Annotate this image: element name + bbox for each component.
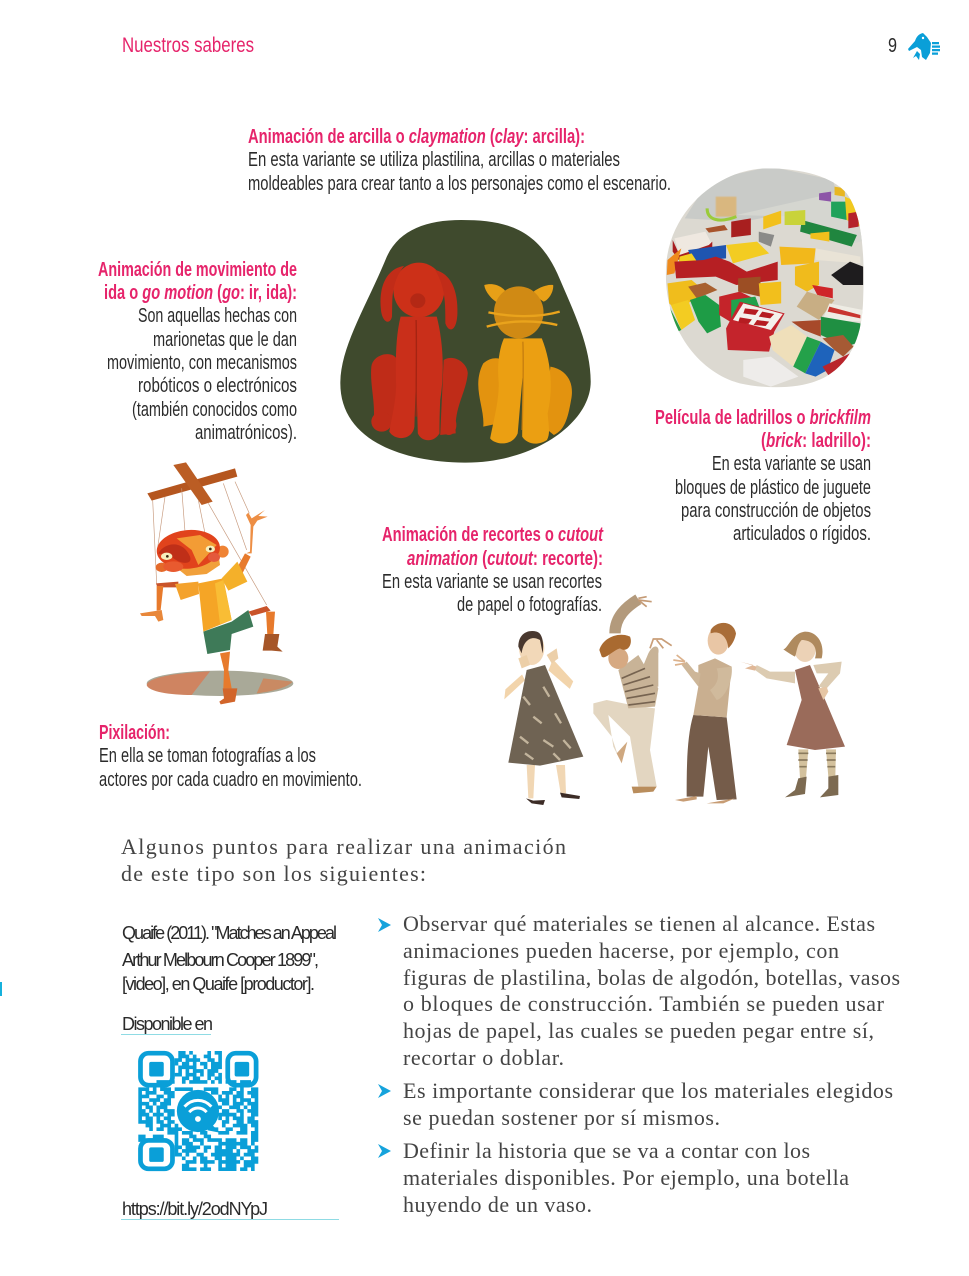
bullet one text [403, 911, 900, 1070]
child: girl with brown dress [740, 632, 845, 797]
citation: [video], en Quaife [productor]. [122, 974, 315, 994]
arrow bullet one [378, 918, 391, 932]
bullet three text: materiales disponibles. Por ejemplo, una botella [403, 1165, 849, 1190]
bullet one text: hojas de papel, las cuales se pueden pegar entre sí, [403, 1018, 874, 1043]
section heading: de este tipo son los siguientes: [121, 861, 426, 886]
body: brickfilm: para construcción de objetos [681, 500, 871, 522]
body: go motion: marionetas que le dan [153, 329, 297, 351]
body: go motion [107, 305, 297, 444]
bullet two [378, 1078, 893, 1130]
heading: brickfilm: (brick: ladrillo): [761, 430, 871, 452]
section heading: Algunos puntos para realizar una animación [121, 834, 566, 859]
body: cutout animation: de papel o fotografías. [457, 594, 602, 616]
clay dog [371, 263, 468, 440]
body: go motion: movimiento, con mecanismos [107, 352, 297, 374]
label: available at: Disponible en [122, 1014, 213, 1034]
body: go motion: animatrónicos). [195, 422, 297, 444]
body: cutout animation [382, 571, 602, 616]
heading: clay animation: Animación de arcilla o claymation (clay: arcilla): [248, 126, 585, 148]
arrow bullet three [378, 1144, 391, 1158]
text block: brickfilm [655, 407, 871, 545]
heading: brickfilm: Película de ladrillos o brickfilm [655, 407, 871, 429]
body: brickfilm: En esta variante se usan [712, 453, 871, 475]
text block: clay animation [248, 126, 671, 195]
marionette shorts [203, 610, 253, 654]
body: clay animation: moldeables para crear tanto a los personajes como el escenario. [248, 173, 671, 195]
QR centre wifi badge [177, 1090, 220, 1133]
bullet one text: recortar o doblar. [403, 1045, 564, 1070]
body: cutout animation: En esta variante se usan recortes [382, 571, 602, 593]
bullet one text: o bloques de construcción. También se pueden usar [403, 991, 885, 1016]
heading: cutout animation: Animación de recortes o cutout [382, 524, 604, 546]
photo: plastic bricks [661, 167, 867, 390]
text block: cutout animation [382, 524, 604, 616]
bullet one text: figuras de plastilina, bolas de algodón, botellas, vasos [403, 965, 900, 990]
marionette cross [147, 462, 237, 505]
body: pixilation [99, 745, 362, 791]
section heading [121, 834, 566, 886]
body: pixilation: En ella se toman fotografías a los [99, 745, 316, 767]
heading: go motion [98, 259, 297, 304]
bullet one text: animaciones pueden hacerse, por ejemplo, con [403, 938, 839, 963]
marionette strings [153, 482, 267, 605]
bricks [667, 187, 863, 387]
body: brickfilm: articulados o rígidos. [733, 523, 871, 545]
text block: go motion [98, 259, 297, 444]
citation [122, 923, 337, 994]
heading: cutout animation: animation (cutout: recorte): [407, 548, 603, 570]
page number: 9 [888, 35, 897, 57]
body: brickfilm: bloques de plástico de juguete [675, 477, 871, 499]
illustration: marionette [140, 462, 293, 704]
photo: clay dog and cat [340, 220, 591, 463]
heading: go motion: Animación de movimiento de [98, 259, 297, 281]
body: go motion: (también conocidos como [132, 399, 297, 421]
citation: Arthur Melbourn Cooper 1899", [122, 950, 319, 970]
heading: go motion: ida o go motion (go: ir, ida): [104, 282, 297, 304]
bullet list [378, 911, 900, 1217]
bullet three [378, 1138, 849, 1217]
bullet two text: Es importante considerar que los materiales elegidos [403, 1078, 893, 1103]
bullet one [378, 911, 900, 1070]
child: girl with patterned dress [506, 631, 583, 805]
heading: cutout animation [382, 524, 604, 570]
marionette shirt [175, 562, 247, 632]
clay cat [478, 284, 572, 444]
bullet three text: huyendo de un vaso. [403, 1192, 592, 1217]
heading: brickfilm [655, 407, 871, 452]
arrow bullet two [378, 1084, 391, 1098]
QR modules [138, 1053, 258, 1169]
bullet three text [403, 1138, 849, 1217]
marionette limbs [140, 510, 283, 704]
bullet two text: se puedan sostener por sí mismos. [403, 1105, 720, 1130]
marionette head [155, 527, 229, 576]
citation: Quaife (2011). "Matches an Appeal [122, 923, 337, 943]
photo background blob [340, 220, 591, 463]
running header: Nuestros saberes [122, 34, 254, 57]
bullet three text: Definir la historia que se va a contar con los [403, 1138, 810, 1163]
QR code [138, 1053, 258, 1169]
child: boy in striped sweater [593, 597, 672, 793]
body: clay animation [248, 149, 671, 195]
bullet two text [403, 1078, 893, 1130]
body: go motion: robóticos o electrónicos [138, 375, 297, 397]
QR finder patterns [140, 1053, 256, 1169]
margin mark [0, 982, 2, 996]
body: go motion: Son aquellas hechas con [138, 305, 297, 327]
body: pixilation: actores por cada cuadro en movimiento. [99, 769, 362, 791]
body: brickfilm [675, 453, 871, 545]
bricks background [661, 167, 867, 390]
marionette ground shadow [147, 671, 293, 696]
link: https://bit.ly/2odNYpJ [122, 1199, 268, 1219]
illustration: four children [506, 597, 845, 805]
body: clay animation: En esta variante se utiliza plastilina, arcillas o materiales [248, 149, 620, 171]
heading: pixilation: Pixilación: [99, 722, 170, 744]
bullet one text: Observar qué materiales se tienen al alcance. Estas [403, 911, 875, 936]
child: boy with brown trousers [673, 623, 737, 803]
text block: pixilation [99, 722, 362, 791]
icon: blue bird glyph [908, 33, 940, 60]
